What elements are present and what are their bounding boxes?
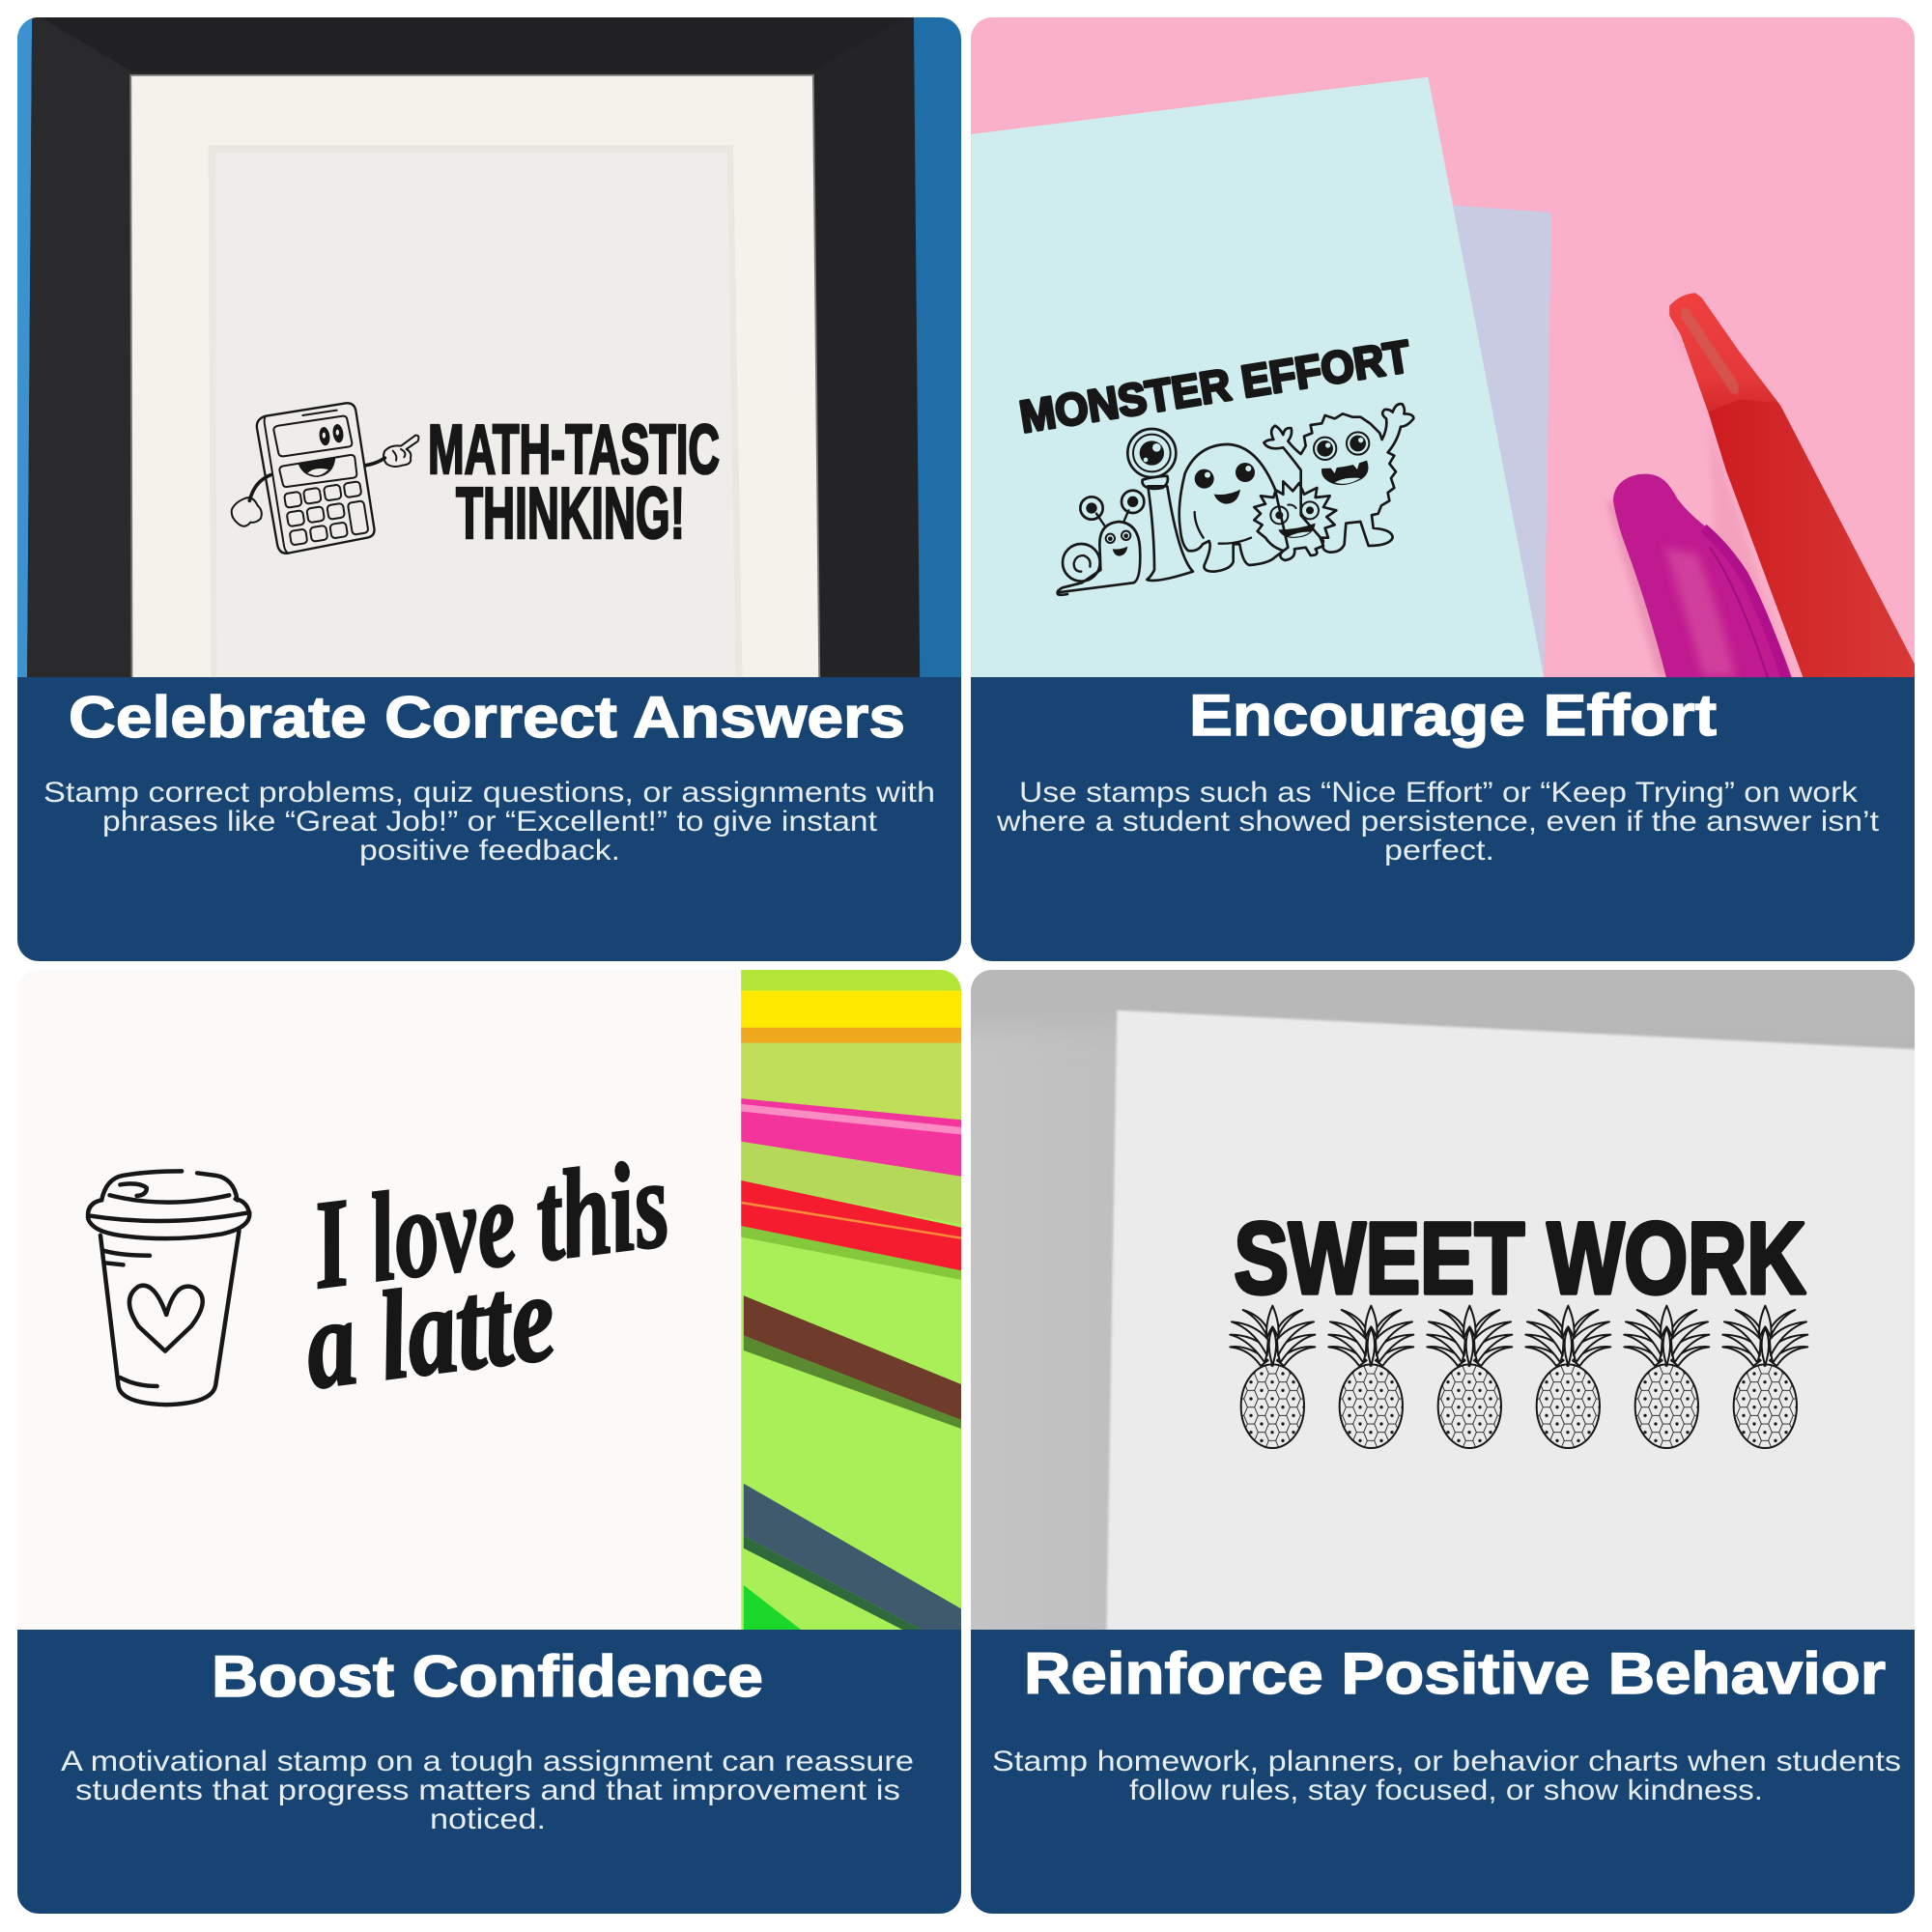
panel: boost confidence xyxy=(13,966,963,1914)
stamp text: math-tastic thinking: MATH-TASTIC xyxy=(428,412,720,489)
stamp text: math-tastic thinking xyxy=(430,423,720,540)
description: Stamp correct problems, quiz questions, or assignments with xyxy=(43,777,935,809)
one-eyed stalk monster xyxy=(1127,429,1193,581)
photo: white paper and colour pencils xyxy=(741,970,961,1630)
caption box xyxy=(17,1630,961,1914)
red pencil xyxy=(741,1180,963,1271)
stamp illustration: coffee cup with heart xyxy=(88,1171,249,1405)
stamp text: i love this a latte: I love this xyxy=(304,1133,676,1316)
description xyxy=(61,1750,912,1830)
stamp illustration: six pineapples xyxy=(1230,1306,1807,1448)
stamp text: sweet work: SWEET WORK xyxy=(1234,1203,1805,1316)
stamp illustration: calculator mascot xyxy=(232,403,418,554)
heading: Celebrate Correct Answers xyxy=(69,685,905,750)
stamp text: math-tastic thinking: THINKING! xyxy=(456,472,685,554)
heading: Boost Confidence xyxy=(212,1644,763,1709)
description: students that progress matters and that improvement is xyxy=(75,1775,900,1806)
description: phrases like “Great Job!” or “Excellent!” to give instant xyxy=(102,806,878,838)
stamp illustration: monsters xyxy=(1058,404,1413,595)
panel: celebrate correct answers xyxy=(13,13,967,961)
caption box xyxy=(971,1630,1915,1914)
caption box xyxy=(17,677,961,961)
magenta pen xyxy=(1613,474,1792,678)
description: positive feedback. xyxy=(359,835,620,867)
description xyxy=(992,1746,1901,1806)
photo: coloured paper and pens xyxy=(966,13,1927,681)
snail monster xyxy=(1058,491,1144,595)
description: where a student showed persistence, even if the answer isn’t xyxy=(996,806,1880,838)
photo: framed math stamp print xyxy=(13,13,967,681)
heading: Encourage Effort xyxy=(1189,683,1717,748)
description: follow rules, stay focused, or show kindness. xyxy=(1129,1775,1763,1806)
description: Use stamps such as “Nice Effort” or “Keep Trying” on work xyxy=(1019,777,1859,809)
inner mat window xyxy=(209,146,743,681)
description: A motivational stamp on a tough assignment can reassure xyxy=(61,1746,914,1777)
description: noticed. xyxy=(430,1804,546,1835)
description: perfect. xyxy=(1384,835,1494,867)
pink pencil xyxy=(741,1098,963,1177)
pen shadows xyxy=(1606,442,1779,677)
photo: white card on grey wall xyxy=(948,948,1932,1634)
light blue sheet xyxy=(971,77,1544,678)
big fuzzy monster xyxy=(1264,404,1413,553)
panel: reinforce positive behavior xyxy=(948,948,1932,1914)
picture frame xyxy=(27,13,920,681)
description xyxy=(996,777,1880,867)
heading: Reinforce Positive Behavior xyxy=(1024,1641,1886,1706)
green pencil xyxy=(744,1585,801,1630)
description xyxy=(43,777,935,867)
red pen xyxy=(1669,293,1916,678)
brown pencil xyxy=(744,1295,963,1421)
caption box xyxy=(971,677,1915,961)
stamp text: i love this a latte xyxy=(308,1161,668,1389)
lavender sheet xyxy=(1453,205,1551,678)
blob monster xyxy=(1179,444,1288,572)
small fuzzy monster xyxy=(1254,481,1336,560)
slate pencil xyxy=(744,1484,963,1637)
panel: encourage effort xyxy=(966,13,1927,961)
cream mat xyxy=(130,75,819,681)
stamp text: i love this a latte: a latte xyxy=(298,1246,562,1416)
stamp text: monster effort: MONSTER EFFORT xyxy=(1016,330,1413,442)
description: Stamp homework, planners, or behavior charts when students xyxy=(992,1746,1901,1777)
